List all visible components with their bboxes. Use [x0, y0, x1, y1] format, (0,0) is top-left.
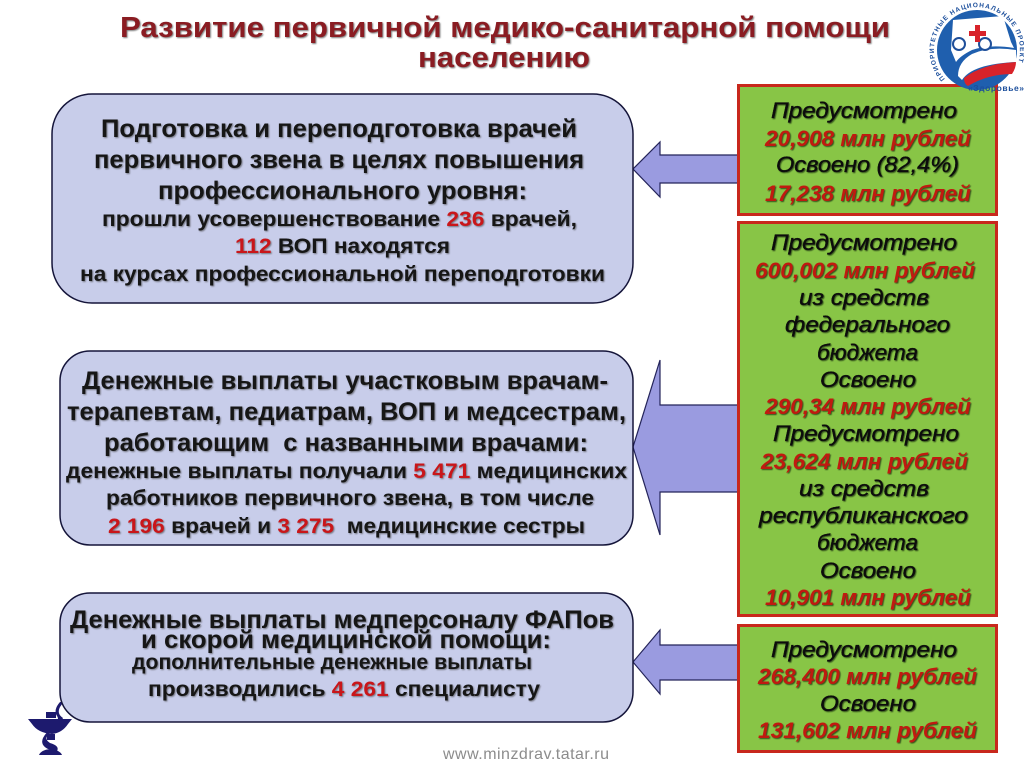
- funding text 3: 131,602 млн рублей: [758, 718, 978, 743]
- funding text 2: 290,34 млн рублей: [764, 394, 972, 419]
- title: Развитие первичной медико-санитарной помощи: [120, 12, 890, 44]
- icon: national project Health logo: [930, 2, 1024, 93]
- funding text 2: 10,901 млн рублей: [765, 585, 972, 610]
- funding text 2: бюджета: [817, 340, 918, 365]
- panel text: payments to district doctors: работающим с названными врачами:: [104, 429, 588, 457]
- funding text 2: Предусмотрено: [771, 230, 957, 255]
- footer url: www.minzdrav.tatar.ru: [442, 746, 609, 763]
- funding text 3: 268,400 млн рублей: [757, 664, 978, 689]
- funding text 2: республиканского: [758, 503, 968, 528]
- funding text 3: Предусмотрено: [771, 637, 957, 662]
- funding text 1: 20,908 млн рублей: [764, 126, 972, 151]
- panel: funding box 1: [738, 86, 996, 214]
- panel: funding box 3: [738, 626, 996, 752]
- panel text: physician training: первичного звена в целях повышения: [94, 146, 584, 174]
- panel: payments to district doctors: [60, 351, 633, 545]
- funding text 2: Предусмотрено: [773, 421, 959, 446]
- funding text 2: 600,002 млн рублей: [755, 258, 976, 283]
- panel: funding box 2: [738, 222, 996, 616]
- panel text: physician training: прошли усовершенствование 236 врачей,: [102, 207, 577, 231]
- icon: bowl of Hygieia: [28, 702, 72, 755]
- arrow: top: [633, 142, 738, 197]
- panel text: physician training: на курсах профессиональной переподготовки: [80, 262, 605, 286]
- arrow: middle: [633, 360, 738, 535]
- panel text: payments to district doctors: [66, 367, 627, 538]
- panel text: payments to district doctors: Денежные выплаты участковым врачам-: [82, 367, 608, 395]
- panel text: payments to FAP and ambulance staff: и скорой медицинской помощи:: [141, 626, 551, 654]
- funding text 1: Освоено (82,4%): [776, 152, 959, 177]
- title: [120, 12, 890, 74]
- title: населению: [418, 42, 590, 74]
- funding text 2: бюджета: [817, 530, 918, 555]
- funding text 2: из средств: [799, 476, 929, 501]
- funding text 2: из средств: [799, 285, 929, 310]
- funding text 2: [755, 230, 976, 610]
- funding text 1: 17,238 млн рублей: [765, 181, 972, 206]
- panel text: payments to FAP and ambulance staff: [70, 606, 614, 701]
- panel: payments to FAP and ambulance staff: [60, 593, 633, 722]
- panel text: physician training: [80, 115, 605, 286]
- panel text: payments to FAP and ambulance staff: производились 4 261 специалисту: [148, 677, 540, 701]
- funding text 1: [764, 98, 972, 206]
- panel text: physician training: 112 ВОП находятся: [235, 234, 450, 258]
- funding text 1: Предусмотрено: [771, 98, 957, 123]
- panel text: payments to district doctors: работников первичного звена, в том числе: [106, 486, 594, 510]
- funding text 2: Освоено: [820, 367, 916, 392]
- funding text 3: Освоено: [820, 691, 916, 716]
- funding text 3: [757, 637, 978, 743]
- panel text: payments to district doctors: денежные выплаты получали 5 471 медицинских: [66, 459, 627, 483]
- arrow: bottom: [633, 630, 738, 694]
- panel text: payments to FAP and ambulance staff: Денежные выплаты медперсоналу ФАПов: [70, 606, 614, 634]
- panel text: payments to district doctors: терапевтам, педиатрам, ВОП и медсестрам,: [67, 398, 626, 426]
- panel text: payments to FAP and ambulance staff: дополнительные денежные выплаты: [132, 650, 532, 674]
- funding text 2: 23,624 млн рублей: [760, 449, 969, 474]
- funding text 2: Освоено: [820, 558, 916, 583]
- panel text: payments to district doctors: 2 196 врачей и 3 275 медицинские сестры: [108, 514, 585, 538]
- panel text: physician training: профессионального уровня:: [158, 177, 527, 205]
- panel text: physician training: Подготовка и переподготовка врачей: [101, 115, 577, 143]
- panel: physician training: [52, 94, 633, 303]
- funding text 2: федерального: [785, 312, 950, 337]
- icon: national project Health logo: «Здоровье»: [968, 83, 1024, 93]
